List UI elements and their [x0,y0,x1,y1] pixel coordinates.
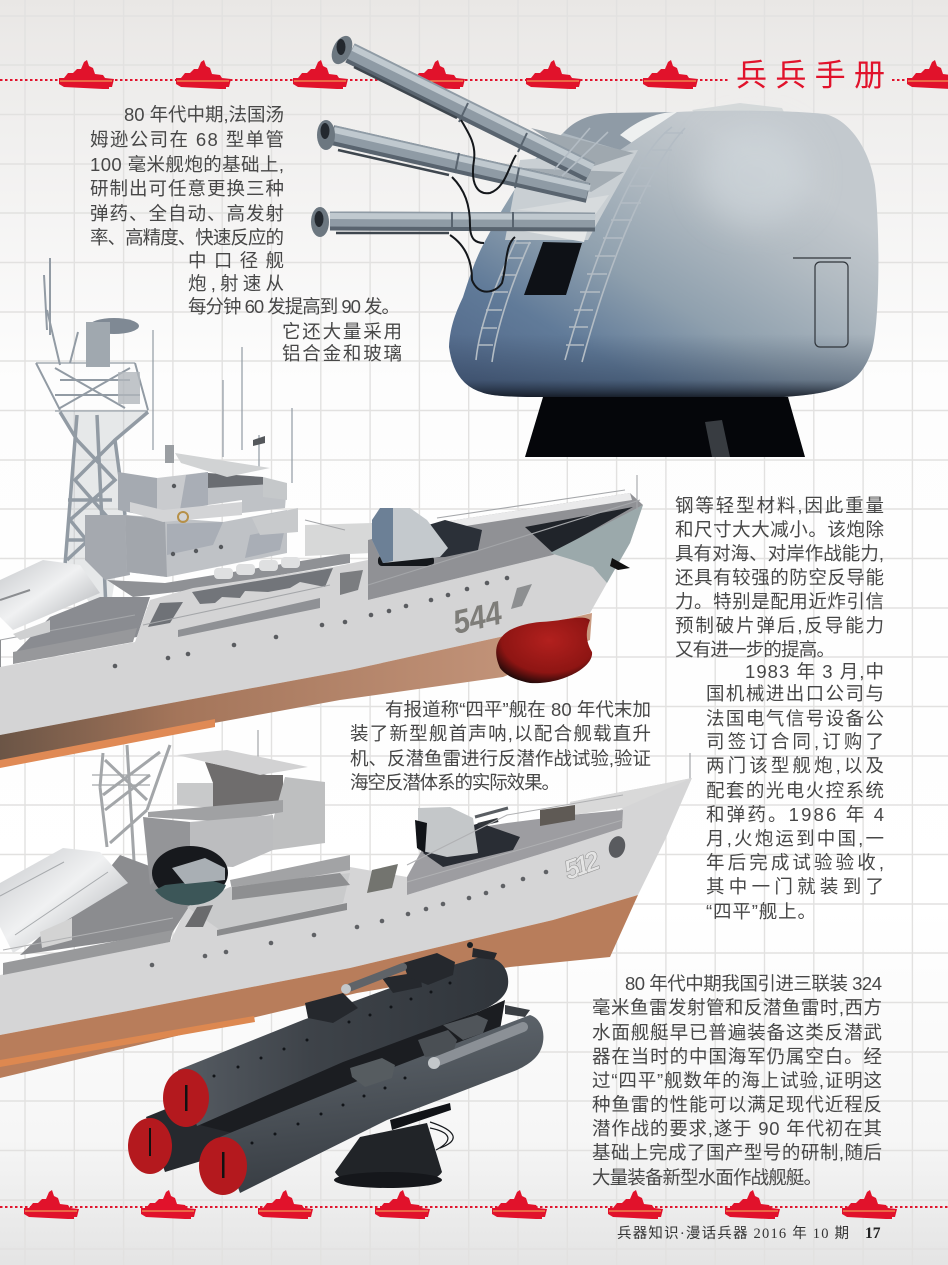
ladders [476,127,685,362]
text block: sonar report: 海空反潜体系的实际效果。 [350,772,560,793]
awning and bridge [205,762,283,812]
text block: gun capability and purchase: “四平”舰上。 [706,901,816,922]
text block: torpedo tubes: 种鱼雷的性能可以满足现代近程反 [592,1094,882,1115]
footer with page number: 17 [865,1225,881,1242]
mast and antennas [36,258,292,630]
hull side [0,505,643,735]
text block: gun capability and purchase: 其中一门就装到了 [706,876,884,897]
bottom barrel [330,216,595,222]
rails [3,795,623,950]
upper bridge [118,472,157,518]
recoil rods [336,67,457,233]
text block: gun capability and purchase: 1983 年 3 月,中 [745,661,884,682]
text block: sonar report [350,699,651,793]
torpedo launcher tubes [128,942,543,1195]
text block: gun introduction: 研制出可任意更换三种 [90,178,284,199]
dark recess behind launcher [20,855,190,955]
gun dome [372,508,448,563]
mast backing [60,412,148,630]
text block: gun capability and purchase: 配套的光电火控系统 [706,780,884,801]
text block: gun capability and purchase: 月,火炮运到中国,一 [706,828,884,849]
dome shading [449,111,878,397]
gun deck shadow [423,823,520,867]
text block: gun capability and purchase [675,495,884,922]
top tube fittings [305,948,497,1023]
bow sonar patch [550,505,643,583]
text block: gun capability and purchase: 司签订合同,订购了 [706,731,884,752]
fore deck [368,493,643,600]
text block: gun introduction: 姆逊公司在 68 型单管 [90,129,284,150]
pedestal [335,1123,442,1187]
text block: gun capability and purchase: 年后完成试验验收, [706,852,884,873]
hull side [0,778,692,1035]
hull number: 544 [449,594,505,641]
text block: gun capability and purchase: 国机械进出口公司与 [706,683,884,704]
section heading: 兵兵手册 [736,50,885,95]
barrel muzzles [311,33,356,237]
top hatch [692,103,784,113]
portholes [150,870,548,967]
text block: gun introduction: 炮,射速从 [188,273,284,294]
text block: gun capability and purchase: 又有进一步的提高。 [675,639,835,660]
superstructure side details [192,568,333,604]
text block: gun capability and purchase: 两门该型舰炮,以及 [706,755,884,776]
text block: gun capability and purchase: 和弹药。1986 年 4 [706,804,884,825]
gun port window [524,242,582,295]
middle barrel [332,130,590,193]
CIWS circle inset [152,846,228,900]
bulbous bow [496,618,592,683]
text block: torpedo tubes: 80 年代中期我国引进三联装 324 [625,973,882,994]
text block: gun capability and purchase: 具有对海、对岸作战能力, [675,543,884,564]
text block: gun introduction [90,104,402,364]
portholes [113,576,509,668]
top tube [178,957,508,1126]
text block: gun capability and purchase: 和尺寸大大减小。该炮除 [675,519,884,540]
top dotted line with red ship icons [0,60,948,89]
text block: gun introduction: 每分钟 60 发提高到 90 发。 [188,296,400,317]
mast [92,730,690,927]
text block: gun introduction: 它还大量采用 [282,321,402,342]
text block: gun capability and purchase: 钢等轻型材料,因此重量 [675,495,884,516]
text block: torpedo tubes: 水面舰艇早已普遍装备这类反潜武 [592,1022,882,1043]
bottom dotted line with red ship icons [0,1190,948,1219]
text block: gun introduction: 铝合金和玻璃 [282,343,402,364]
galley deck and side structure [230,855,350,890]
text block: torpedo tubes: 潜作战的要求,遂于 90 年代初在其 [592,1118,882,1139]
ship illustration: type 512 frigate [0,730,692,1078]
naval gun turret [311,33,878,457]
cables [450,120,516,292]
text block: sonar report: 有报道称“四平”舰在 80 年代末加 [385,699,651,720]
lifeboats [214,557,300,579]
opening behind barrels [505,150,638,240]
missile launcher [0,560,100,630]
text block: gun introduction: 80 年代中期,法国汤 [124,104,284,125]
gallery deck [107,553,350,597]
text block: torpedo tubes: 器在当时的中国海军仍属空白。经 [592,1046,882,1067]
footer with page number: 兵器知识·漫话兵器 2016 年 10 期 [617,1225,849,1242]
ship illustration: type 544 frigate [0,258,643,768]
main superstructure [125,510,287,577]
text block: gun capability and purchase: 预制破片弹后,反导能力 [675,615,884,636]
gun deck shadow [378,520,482,560]
rails [0,475,640,640]
text block: sonar report: 机、反潜鱼雷进行反潜作战试验,验证 [350,748,651,769]
aft deck [13,628,137,664]
text block: sonar report: 装了新型舰首声呐,以配合舰载直升 [350,723,651,744]
text block: torpedo tubes: 基础上完成了国产型号的研制,随后 [592,1142,882,1163]
middle tube [146,1067,320,1172]
front tube [220,1015,543,1193]
aft deck [3,930,173,975]
text block: gun introduction: 率、高精度、快速反应的 [90,227,284,248]
boot topping [0,895,638,1078]
shields [531,128,634,167]
tower back [85,515,130,580]
vent holes [212,982,452,1144]
missile launcher [0,848,128,953]
text block: gun introduction: 100 毫米舰炮的基础上, [90,154,284,175]
gun turret [418,807,478,857]
hull number: 512 [560,845,604,886]
text block: torpedo tubes [592,973,882,1188]
midship fitting box [305,523,372,556]
text block: gun capability and purchase: 力。特别是配用近炸引信 [675,591,884,612]
text block: gun introduction: 弹药、全自动、高发射 [90,203,284,224]
barrel collars [452,103,527,231]
pedestal [525,397,805,457]
text block: gun capability and purchase: 法国电气信号设备公 [706,708,884,729]
dark gap between tubes [200,1000,505,1135]
recess behind launcher [13,597,150,655]
dome highlight [700,125,810,225]
hatch door [793,258,851,347]
dome body [449,111,878,397]
front tube fittings [350,1058,395,1087]
rear dome section [563,112,677,170]
fore deck [407,810,623,895]
text block: torpedo tubes: 大量装备新型水面作战舰艇。 [592,1167,822,1188]
text block: torpedo tubes: 过“四平”舰数年的海上试验,证明这 [592,1070,882,1091]
top barrel [350,48,593,172]
text block: gun introduction: 中口径舰 [188,250,284,271]
boot topping [0,613,592,762]
text block: gun capability and purchase: 还具有较强的防空反导能 [675,567,884,588]
text block: torpedo tubes: 毫米鱼雷发射管和反潜鱼雷时,西方 [592,997,882,1018]
